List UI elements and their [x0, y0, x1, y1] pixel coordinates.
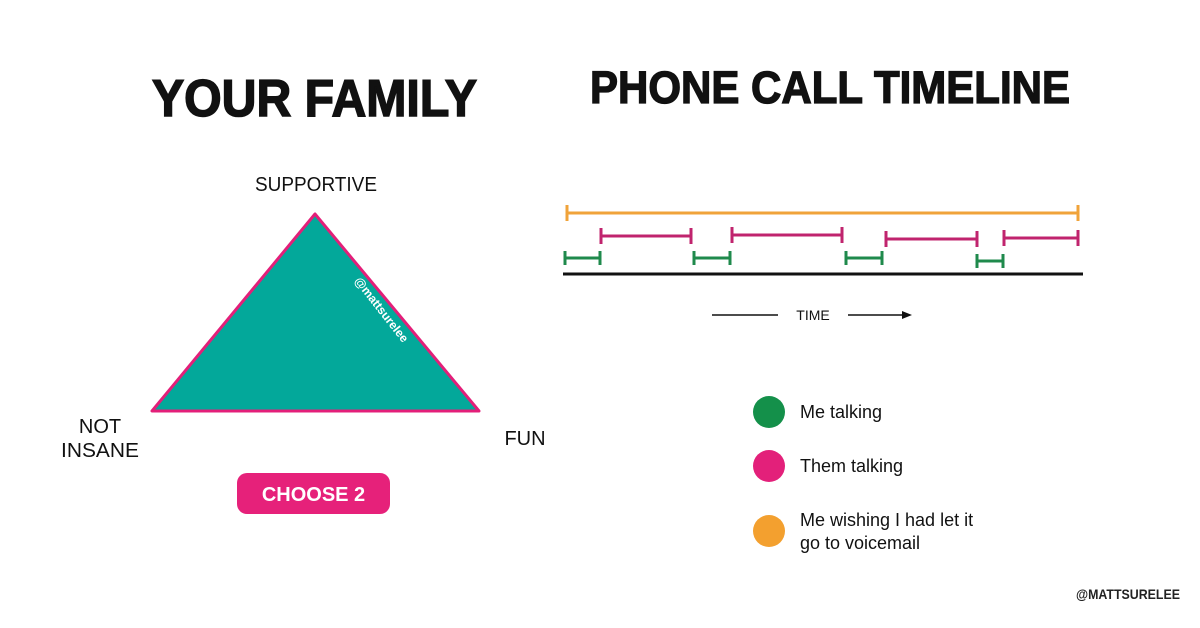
title: phone call timeline: PHONE CALL TIMELINE: [590, 62, 1070, 113]
legend: them talking: [753, 450, 903, 482]
label: insane: INSANE: [61, 440, 139, 462]
pink bars: [601, 227, 1078, 247]
time arrow: [712, 307, 912, 323]
legend: voicemail: go to voicemail: [800, 533, 920, 553]
button: choose 2: CHOOSE 2: [262, 484, 365, 506]
triangle chart: [152, 214, 479, 411]
label: fun: FUN: [504, 428, 546, 450]
time arrow: TIME: [796, 307, 830, 323]
watermark text: @mattsurelee: [352, 274, 412, 345]
button: choose 2: [237, 473, 390, 514]
title: your family: YOUR FAMILY: [152, 70, 477, 128]
legend: them talking: Them talking: [800, 456, 903, 476]
legend: me talking: [753, 396, 882, 428]
label: supportive: SUPPORTIVE: [255, 174, 377, 196]
orange bar: [567, 205, 1078, 221]
axis: [563, 272, 1083, 276]
legend: voicemail: [753, 510, 973, 553]
legend: [753, 396, 973, 553]
timeline chart: [563, 205, 1083, 274]
signature: @MATTSURELEE: [1076, 586, 1180, 602]
legend: me talking: Me talking: [800, 402, 882, 422]
green bars: [565, 251, 1003, 268]
legend: voicemail: Me wishing I had let it: [800, 510, 973, 530]
label: not insane: NOT: [79, 416, 121, 438]
